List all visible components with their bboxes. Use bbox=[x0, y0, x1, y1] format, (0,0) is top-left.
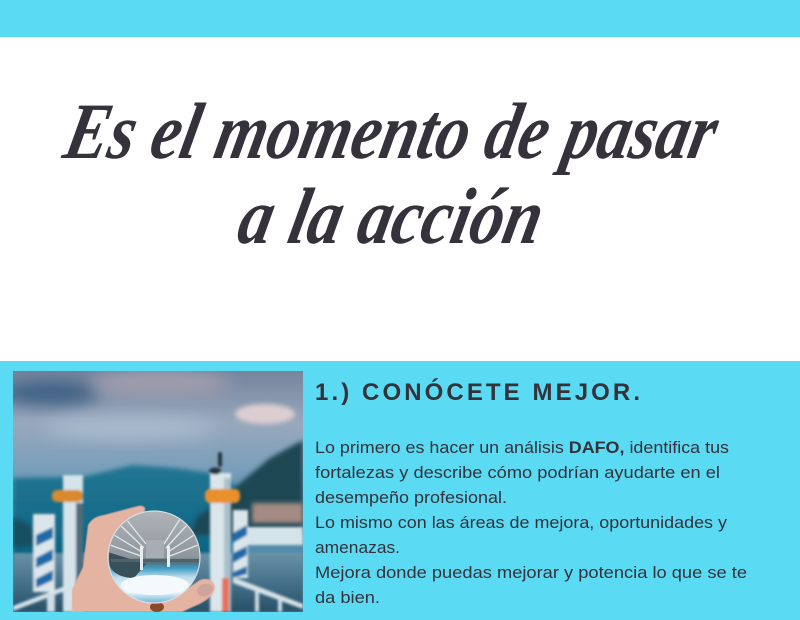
photo: hand holding crystal ball on a pier bbox=[0, 371, 303, 612]
text block: body copy bbox=[315, 439, 747, 607]
text block: body copy: da bien. bbox=[315, 589, 380, 607]
text block: body copy: desempeño profesional. bbox=[315, 489, 507, 507]
text block: body copy: amenazas. bbox=[315, 539, 400, 557]
text block: body copy: Mejora donde puedas mejorar y potencia lo que se te bbox=[315, 564, 747, 582]
title bbox=[56, 88, 727, 261]
icon: hand bbox=[72, 506, 215, 612]
icon: crystal ball bbox=[108, 511, 201, 603]
text block: body copy: Lo mismo con las áreas de mejora, oportunidades y bbox=[315, 514, 728, 532]
top cyan band bbox=[0, 0, 800, 37]
text block: body copy: fortalezas y describe cómo podrían ayudarte en el bbox=[315, 464, 720, 482]
panel background bbox=[0, 361, 800, 620]
text block: body copy: Lo primero es hacer un análisis DAFO, identifica tus bbox=[315, 439, 729, 457]
heading: 1.) CONÓCETE MEJOR. bbox=[315, 378, 640, 406]
title: a la acción bbox=[231, 173, 552, 261]
panel: lower section bbox=[0, 361, 800, 620]
